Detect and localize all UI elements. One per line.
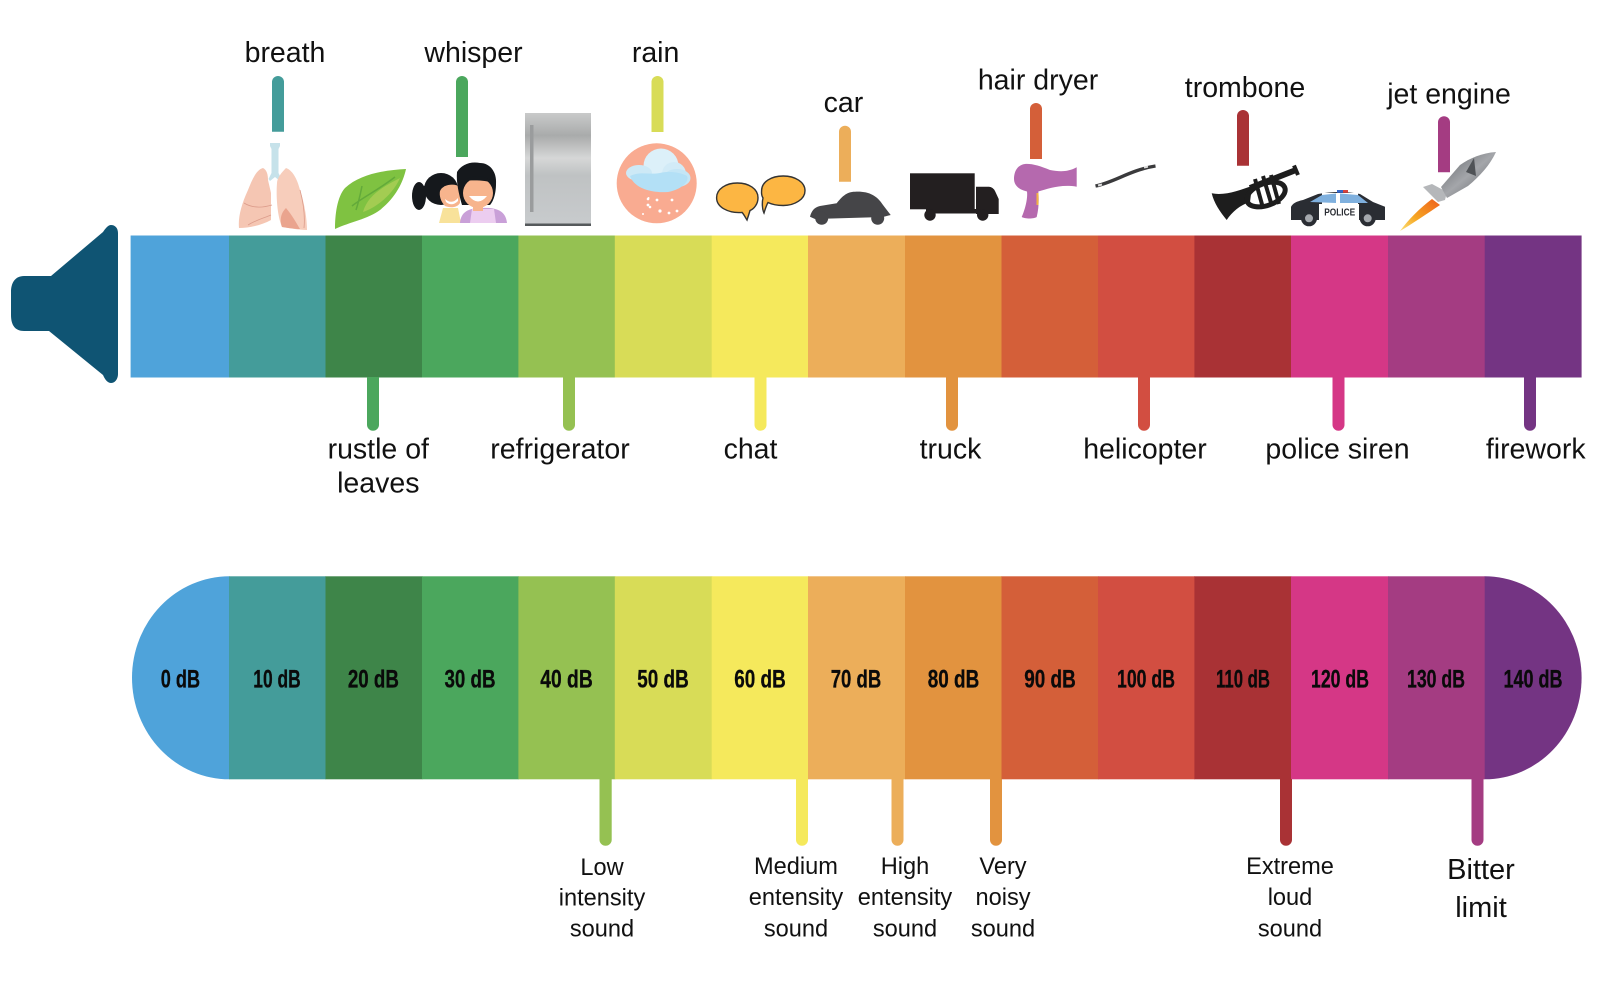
label: low intensity sound: Low [580, 855, 625, 881]
icon: leaf [335, 169, 406, 229]
label: breath: breath [245, 37, 325, 69]
decibel value labels: 60 dB [734, 665, 786, 693]
label: rustle of leaves: leaves [337, 468, 419, 500]
bottom tick marks of top scale [367, 377, 1536, 431]
decibel value labels: 110 dB [1216, 665, 1270, 693]
icon: hair dryer [1014, 164, 1077, 218]
decibel value labels: 100 dB [1117, 665, 1175, 693]
label: rustle of leaves: rustle of [328, 433, 429, 465]
decibel value labels: 0 dB [161, 665, 200, 693]
intensity tick marks [600, 779, 1484, 846]
label: police siren: police siren [1265, 433, 1410, 465]
label: high entensity sound: High [881, 854, 929, 880]
label: extreme loud sound: sound [1258, 917, 1322, 943]
decibel value labels: 120 dB [1311, 665, 1369, 693]
label: very noisy sound: sound [971, 917, 1035, 943]
decibel value labels: 130 dB [1407, 665, 1465, 693]
top colour scale bar [131, 236, 1582, 378]
decibel value labels [161, 665, 1562, 693]
label: helicopter: helicopter [1083, 433, 1207, 465]
icon: helicopter [1096, 166, 1156, 186]
label: high entensity sound: sound [873, 917, 937, 943]
label: refrigerator: refrigerator [490, 433, 630, 465]
decibel value labels: 40 dB [540, 665, 593, 693]
label: trombone: trombone [1185, 72, 1305, 104]
icon: rain cloud [617, 143, 697, 223]
decibel value labels: 20 dB [348, 665, 399, 693]
label: very noisy sound: Very [979, 854, 1027, 880]
decibel value labels: 30 dB [444, 665, 496, 693]
icon: whispering children [412, 162, 507, 223]
decibel value labels: 50 dB [637, 665, 689, 693]
icon: speech bubbles [717, 176, 805, 220]
icon: speaker [11, 225, 118, 383]
icon: police car [1291, 190, 1385, 226]
label: bitter limit: limit [1455, 892, 1507, 924]
label: whisper: whisper [423, 37, 523, 69]
icon: lungs [239, 143, 307, 230]
icon: truck silhouette [910, 173, 999, 221]
label: hair dryer: hair dryer [978, 64, 1099, 96]
label: high entensity sound: entensity [858, 885, 952, 911]
icon: jet [1400, 152, 1496, 231]
decibel value labels: 90 dB [1024, 665, 1076, 693]
label: firework: firework [1486, 433, 1586, 465]
label: very noisy sound: noisy [975, 885, 1031, 911]
decibel value labels: 10 dB [253, 665, 301, 693]
label: car: car [824, 87, 864, 119]
label: truck: truck [920, 433, 982, 465]
bottom decibel scale bar [132, 576, 1582, 779]
label: rain: rain [632, 37, 679, 69]
label: medium entensity sound: entensity [749, 885, 843, 911]
label: chat: chat [724, 433, 778, 465]
label: medium entensity sound: sound [764, 917, 828, 943]
label: bitter limit: Bitter [1447, 854, 1515, 886]
label: low intensity sound: sound [570, 917, 634, 943]
label: jet engine: jet engine [1386, 78, 1511, 110]
label: extreme loud sound: loud [1268, 885, 1312, 911]
icon: car silhouette [810, 192, 891, 225]
icon: trumpet [1212, 166, 1298, 220]
decibel value labels: 140 dB [1504, 665, 1562, 693]
label: medium entensity sound: Medium [754, 854, 838, 880]
label: low intensity sound: intensity [559, 886, 645, 912]
text: POLICE: POLICE [1324, 206, 1355, 218]
top tick marks [272, 76, 1450, 182]
icon: refrigerator [525, 113, 591, 226]
decibel value labels: 70 dB [831, 665, 881, 693]
label: extreme loud sound: Extreme [1246, 854, 1334, 880]
decibel value labels: 80 dB [928, 665, 979, 693]
